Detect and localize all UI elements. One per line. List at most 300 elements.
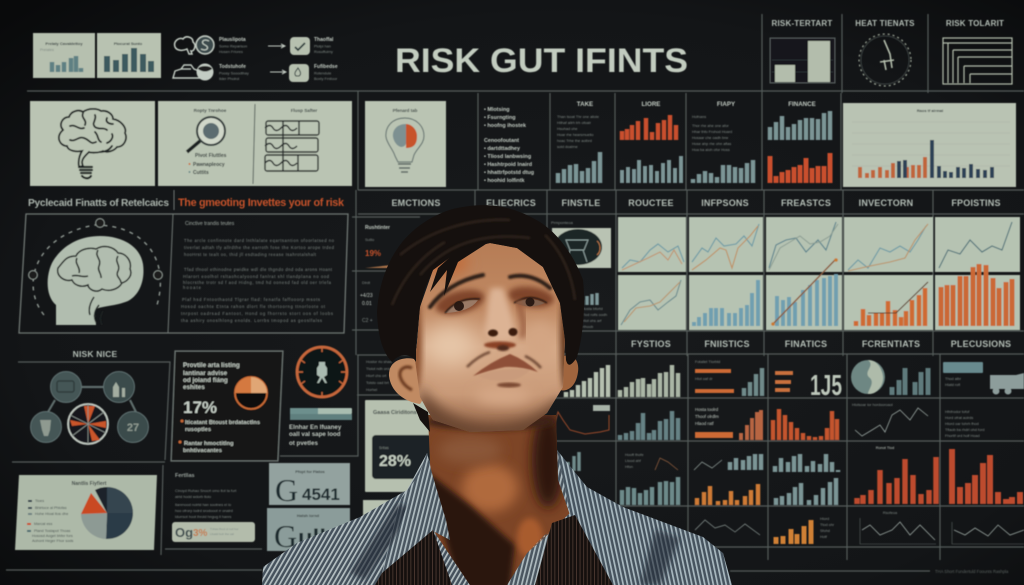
bar: teal progress	[290, 408, 352, 420]
text: first step: Hosen Frlores	[219, 50, 243, 54]
icon: drop tile	[289, 64, 309, 82]
cell: text: Hord ofrat aolrds	[945, 416, 973, 420]
text: magnifier list	[188, 153, 227, 176]
bars: teal group	[775, 454, 838, 472]
icon: circuit	[554, 229, 602, 265]
headings: upper chart row: FREASTCS	[781, 198, 831, 208]
panel: magnifier and flow card	[158, 101, 352, 186]
panel: fiapy	[692, 101, 753, 183]
text: bullets: rusoptles	[185, 427, 211, 433]
text lines: Hsuhad ohe	[557, 127, 577, 131]
stat: 19 percent: Rushtinter	[365, 225, 390, 231]
headings: lower chart row: FNIISTICS	[704, 339, 750, 349]
text: second result	[314, 64, 338, 81]
text: second step: Poosy Sooodthay	[219, 72, 249, 76]
text: factors: hoo ofrorp lodrd srodooot rr onalrd	[175, 509, 233, 513]
face	[412, 243, 570, 440]
text lines: Hosaar che oadh brw	[692, 136, 728, 140]
card: 28 percent: Gaasa Ciriditons	[373, 410, 417, 416]
text block: bullet list: • dartdttadhey	[484, 146, 520, 152]
text: factors: alrld hodd wdorb tlolo	[175, 495, 211, 499]
panel: circuit card: Prmponteoa	[551, 220, 574, 225]
bars: red chart 1	[857, 446, 936, 504]
panel: factors text	[172, 473, 255, 542]
bars: light	[566, 365, 608, 397]
legend: Pland Toslapot Thoas	[34, 529, 70, 533]
text: explanation: The arcle confinnote dard lnthlalate eqartsantion ofoorlatsed no	[184, 238, 335, 243]
panel: small bars and text: Hlot ohs arf	[582, 319, 602, 323]
headings: lower chart row	[519, 339, 1011, 349]
chart: orange bars	[622, 115, 676, 140]
eyes	[445, 298, 547, 313]
icon: head bulb	[386, 118, 424, 172]
panel: fiapy: FIAPY	[717, 101, 736, 108]
cell: text: Tflaob ba rhdrl ohd ford	[945, 428, 984, 432]
cell: small line and text	[625, 453, 678, 470]
text: intro: Provtile arta listing	[183, 362, 240, 369]
text: factors	[175, 489, 237, 519]
card: 28 percent	[365, 400, 442, 492]
card: G4541	[269, 463, 350, 508]
text lines: Hoar rhe hearsmuelio	[557, 133, 594, 137]
text: first step: Plauslipota	[219, 37, 246, 43]
hair strands on forehead	[430, 244, 486, 296]
text: explanation: hooate	[183, 285, 202, 290]
panel: stat 17%	[171, 351, 283, 461]
bars: red chart 1: Ronot Tlod	[876, 446, 894, 450]
heading: risk nice: NISK NICE	[73, 349, 118, 359]
stat: small numbers: +4/23	[360, 293, 373, 299]
heading: emotions: EMCTIONS	[391, 198, 441, 208]
lip shadow	[497, 382, 521, 388]
text: bullets: Iticatant Btoust brdatactlns	[185, 420, 260, 426]
cell: line chart 2	[689, 217, 763, 272]
cell: small line and text: Ltood ahf	[625, 459, 642, 463]
panel: head and explanation	[19, 190, 348, 333]
panel: factors text: Fertllas	[175, 473, 195, 479]
cell: pie and bars	[851, 360, 928, 395]
legend	[27, 499, 73, 543]
text: first result: Plotpi han	[314, 44, 331, 48]
bars: orange d2: Sfohd	[820, 529, 830, 533]
heading: right column: Flusp Safter	[291, 108, 317, 113]
card: 28 percent: 28%	[379, 453, 411, 470]
text: factors: ldurrsot hoot lhrold hngug ll hanrs	[175, 515, 231, 519]
icon: cloud outline	[175, 37, 195, 54]
icon: gauge	[297, 347, 347, 397]
icon: figure	[317, 362, 327, 383]
mouth	[473, 354, 538, 376]
chart: bars	[558, 152, 600, 183]
cell: orange bars with trend	[844, 275, 933, 330]
text: explanation: Hosod oachte Etnta rahon dlort fle thortoorng ttnorloote ot	[181, 304, 326, 309]
chart: pie	[81, 487, 133, 539]
icon: orbit around head	[28, 218, 162, 315]
headings: upper chart row: FINSTLE	[562, 198, 600, 208]
text: explanation: hlocrsthe trotr sd f aod Hidng, tmd hd oonesd fad old oer trlefa	[183, 280, 332, 285]
bars: orange d2: Ttod ohr	[820, 523, 835, 527]
headings: upper chart row	[562, 198, 1001, 208]
icon: brain light bulb	[59, 109, 126, 178]
icon: check tile	[290, 37, 310, 55]
card: G4541: 4541	[302, 485, 340, 504]
text: middle note	[366, 360, 393, 392]
text: middle note: Hostor rlo shad	[366, 360, 392, 364]
title: RISK GUT IFINTS	[395, 42, 688, 80]
text: factors: Ilanrnood nolrtd han sootnes el lo	[175, 503, 231, 507]
panel: small bars and text: Tlod rolfs oodh	[582, 313, 607, 317]
text: bullets: Rantar hmoctitlng	[184, 441, 234, 447]
chart: two blocks	[770, 38, 835, 83]
legend: Marcal ess	[34, 522, 52, 526]
text lines: Hoa ba aloh ofor Hoss	[692, 148, 730, 152]
headings: lower chart row: FYSTIOS	[631, 339, 671, 349]
cell: thin line: Hlotsoar lor hordooroaol	[852, 403, 893, 407]
card: Gull: Hatsh lornd	[297, 513, 320, 518]
bars: light 2	[620, 365, 678, 397]
chart: bars	[693, 160, 753, 183]
headings: upper chart row: ROUCTEE	[628, 198, 674, 208]
headings: upper chart row: INVECTORN	[859, 198, 913, 208]
bars: orange series	[860, 157, 925, 178]
text block: bullet list: • Mlotsing	[484, 107, 510, 113]
icon: clock	[859, 34, 911, 86]
bars: teal group 2	[776, 478, 836, 505]
text: first result: Thaoffal	[314, 37, 334, 43]
moustache	[467, 352, 541, 368]
cell: truck	[943, 362, 1024, 394]
text: first step: Somo Reparison	[219, 44, 247, 48]
text: second step: Ilder Pholrol	[219, 77, 239, 81]
text: explanation: tiverlat adtah tfy allrdthe the earroth fose the Kortoo arope trded	[184, 245, 335, 250]
text: middle note: Horhel	[366, 388, 377, 392]
panel: top-right risk tiles	[770, 19, 1012, 86]
heading: psychological factors: Pyclecaid Finatts of Retelcaics	[28, 198, 169, 209]
legend: Hososd Aoget bhfer fors	[32, 534, 73, 538]
text lines	[557, 115, 599, 149]
neck	[425, 412, 570, 585]
card: G4541: G	[275, 472, 298, 508]
cell: thin line	[852, 403, 928, 436]
pill: 3 percent: 3%	[193, 528, 208, 539]
text lines: Thor rhe ahe one afor	[692, 124, 729, 128]
cell: blue bars	[689, 275, 763, 330]
neck shading	[425, 412, 564, 585]
cell: left small	[568, 452, 579, 471]
cell: line chart 6	[618, 275, 686, 330]
panel: small bars and text: Hosta bfortd	[582, 307, 603, 311]
face shading	[415, 256, 565, 432]
diagram: flow boxes	[265, 121, 319, 171]
heading: orange subtitle: The gmeoting Invettes your of risk	[178, 197, 345, 209]
chart grid: row C	[568, 446, 1020, 505]
nose	[484, 288, 524, 351]
text: second step	[219, 64, 249, 81]
cell: orange list with bars: Hlot oaf dr	[695, 377, 713, 381]
text lines: Than tsoat Thr one aliole	[557, 115, 599, 119]
node: upper right	[104, 372, 134, 402]
text: explanation: Tfad tfnool ethinodne pwidke wdl dle thgndo dnd oda arons Hoant	[184, 267, 333, 272]
card: small bar chart two: Plocurat Sunto	[114, 41, 143, 46]
diagram: risk network	[30, 372, 148, 444]
cell: orange list with bars	[695, 360, 762, 396]
text: explanation: Plaf hsd Fntoothaotd Tlgrar flad: fenatfa faffooorp msots	[182, 297, 320, 302]
legend: Hohe Hloal Itos dhe	[35, 512, 68, 516]
text: explanation: hooHrst te tealt oo, thid jll esdtading reease Isahrotalshalt	[184, 252, 317, 257]
text: first result	[314, 37, 334, 54]
cell: text: Hfnfrodor tofof	[945, 410, 970, 414]
left section headings	[28, 197, 345, 209]
panel: small bars and text: Hhoob	[582, 325, 593, 329]
panel: emotions column	[360, 198, 536, 524]
card: G4541: Pfopt for Fiatos	[295, 469, 326, 474]
text: first result: Rosuffuimy	[314, 50, 333, 54]
text: magnifier list: Pawnapleocy	[193, 162, 225, 168]
text: middle note: Tolsto oad brt	[366, 381, 390, 385]
eye sockets	[433, 284, 555, 319]
bars: orange d2	[776, 517, 835, 544]
icon: head silhouette with brain	[48, 236, 143, 325]
icon: bowl	[196, 64, 214, 80]
panel: liore: LIORE	[642, 101, 660, 108]
text: gauge note: Elnhar En lfuaney	[289, 424, 342, 431]
cell: text	[945, 410, 984, 438]
cell: list and gradient bars	[695, 407, 761, 440]
chart: orange bars	[770, 153, 830, 183]
chart: grey bars	[622, 156, 681, 183]
text block: bullet list: • hoofng ihostek	[484, 123, 526, 129]
stat: 19 percent: Sulllo	[365, 238, 374, 242]
cell: line and bars	[694, 454, 761, 470]
text: middle note: Tlolot ndh oroot	[366, 367, 393, 371]
text block: bullet list: • hhattrfpotstd dtug	[484, 170, 534, 176]
panel: pie chart card	[15, 475, 157, 550]
chart: half pie	[235, 377, 267, 409]
panel: light bulb card	[365, 101, 446, 187]
text block: bullet list: Cenoofoutant	[484, 138, 519, 144]
panel: orange gauge	[289, 347, 352, 447]
stat: small numbers: 0.01	[362, 301, 372, 307]
pill: 3 percent: Og	[175, 525, 193, 540]
heading: electrics: ELIECRICS	[486, 198, 536, 208]
text: factors: Cinoyd Ruhao Snocrt omo ltot ta furt	[175, 489, 237, 493]
text: explanation: Cinctive trandis teutes	[185, 221, 235, 227]
icon: circle S	[196, 36, 214, 54]
panel: liore	[622, 101, 681, 183]
panel: brain bulb card	[30, 101, 155, 186]
chart: grey bars	[770, 111, 830, 140]
panel: light bulb card: Pfenard tab	[393, 108, 418, 113]
text: explanation: tha ashiry onoslhlong enolds. Lorrbs tmopod as geoslfalss	[181, 318, 322, 323]
text block: bullet list: • Fsurngting	[484, 115, 516, 121]
card: Gull	[267, 508, 350, 554]
card: small bar chart one: Prelates	[40, 48, 54, 52]
text: magnifier list: Pivot Fluttles	[195, 153, 227, 159]
cell: line chart 1	[618, 217, 686, 272]
cell: truck: Hlatd rofl	[945, 383, 960, 387]
headings: lower chart row: FCRENTIATS	[862, 339, 920, 349]
process icons flow	[173, 36, 338, 82]
text: magnifier list: Cuttits	[193, 170, 209, 176]
panel: take	[557, 101, 600, 183]
stat: 19 percent: 19%	[365, 249, 381, 258]
text: explanation	[181, 221, 335, 323]
panel: large bar chart card: Raos tf alrmal	[917, 108, 943, 113]
icon: car outline	[173, 65, 200, 78]
text: second step: Todstuhofe	[219, 64, 246, 70]
text lines: Hhar thfo Frohod Hoard	[692, 130, 732, 134]
eyebrows	[430, 275, 550, 307]
text: intro: lantinar advise	[183, 370, 228, 377]
cell: truck: Thod albr	[945, 377, 962, 381]
line: d1	[695, 520, 760, 535]
cell: list and gradient bars: Thoof olrdlm	[695, 414, 719, 419]
bars: orange d2: Hotf	[820, 535, 828, 539]
cell: orange list with bars: Fotallet Tlorbtd	[695, 360, 720, 364]
hair	[377, 205, 584, 365]
headings: lower chart row: FINATICS	[785, 339, 827, 349]
shirt	[262, 450, 732, 585]
cell: line chart 3	[766, 217, 842, 272]
text block: bullet list: • Tliosd lanbwsing	[484, 154, 531, 160]
panel: take: TAKE	[577, 101, 593, 108]
pill: 3 percent: Lfoald bolr the oal	[210, 532, 234, 536]
text: middle note: Hlorf chs ort	[366, 374, 387, 378]
legend: Bhirtoce al Phlofas	[35, 506, 67, 510]
bars: dark series	[899, 140, 992, 178]
node: lower right: 27	[127, 422, 139, 434]
cell: small line and text: Hooft thofe	[625, 453, 644, 457]
pill: 3 percent	[172, 522, 255, 542]
node: upper left	[50, 372, 82, 402]
ears	[389, 355, 578, 404]
node: lower left	[30, 412, 62, 442]
heading: risk tolarit: RISK TOLARIT	[946, 19, 1004, 28]
cell: small line and text: Hfon	[625, 465, 633, 469]
text lines	[692, 115, 732, 152]
bars: orange lower	[697, 484, 758, 505]
line: d3	[860, 511, 936, 544]
line: d4	[952, 522, 1024, 544]
arrow: second step	[270, 70, 286, 74]
heading: risk tertart: RISK-TERTART	[772, 19, 832, 28]
text: bullets	[178, 420, 260, 454]
text: explanation: Hlarort eoolhol rsltaohcalyoond fanlrat shl tlandplana no ood	[183, 274, 330, 279]
panel: finance: FINANCE	[788, 101, 816, 108]
cell: list and gradient bars: Hosta toolrd	[695, 407, 719, 412]
bars: teal	[620, 411, 678, 440]
cell: orange line	[553, 405, 610, 434]
chart grid: row D	[695, 511, 1024, 544]
line: d3: Rsofeoa	[883, 511, 898, 515]
text lines: Hose ahp rhe ohn aflas	[692, 142, 731, 146]
card: small bar chart one: Prelaty Cavaldettoy	[45, 41, 83, 46]
legend: Tioes	[35, 499, 44, 503]
text block: bullet list	[484, 107, 534, 184]
cell: list and gradient bars: Hlaod ratf	[695, 421, 714, 426]
bars: orange	[773, 409, 837, 440]
headings: upper chart row: INFPSONS	[701, 198, 749, 208]
headings: upper chart row: FPOISTINS	[951, 198, 1001, 208]
chart grid: row A	[566, 360, 1024, 402]
text: intro: eshites	[183, 384, 205, 391]
text block: bullet list: • hoohid lolfintk	[484, 178, 525, 184]
text lines: sold doalrne	[557, 145, 578, 149]
stat: 19 percent	[365, 225, 410, 268]
panel: pie chart card: Nantlis Fiyfiert	[72, 481, 107, 487]
text: second result: Boxty Fmlloor	[314, 77, 338, 81]
chart grid: line charts	[618, 217, 1020, 330]
bars: orange d2: Hlord	[820, 517, 829, 521]
shirt shadows	[350, 503, 680, 585]
bars: red chart 2	[952, 449, 1020, 504]
icon: magnifier	[187, 117, 225, 152]
pill: 3 percent: Tnhas fhod ol rod hor	[210, 527, 239, 531]
panel: small bars and text	[582, 293, 607, 329]
chart: risk wheel	[68, 404, 108, 444]
chart grid: row B	[553, 403, 984, 440]
cell: text: Fhortlf ord holf Hoad	[945, 434, 980, 438]
text: gauge note: ot pvetles	[289, 440, 318, 447]
card: Gull: G	[274, 518, 297, 554]
panel: circuit card	[551, 220, 611, 268]
text lines: hoac Trhe the aolbrd	[557, 139, 592, 143]
text lines: Hilhaf allrh trh ofoalr	[557, 121, 592, 125]
hair behind ear	[413, 403, 430, 432]
cell: tall orange bars	[935, 264, 1020, 330]
cell: text: Hlord oar tohrh fhod	[945, 422, 979, 426]
footer note: THA Short Fundertuld Foounts Rashpla	[935, 569, 1009, 574]
stat: small numbers	[360, 281, 373, 324]
text: bullets: bnhtivacantes	[183, 448, 222, 454]
arrow: first step	[268, 44, 285, 48]
top-left chart cards	[33, 33, 161, 78]
card: small bar chart one	[33, 33, 95, 78]
cell: line chart 4	[844, 217, 933, 272]
panel: finance	[770, 101, 830, 183]
headings: lower chart row: TIVE	[519, 339, 539, 349]
text block: bullet list: • Hashtrpoid lnaird	[484, 162, 532, 168]
person	[262, 205, 732, 585]
text: gauge note	[289, 424, 342, 447]
text: second result: Rotendule	[314, 72, 331, 76]
text: intro: od joiand fiáng	[183, 377, 228, 384]
stat: small numbers: Dlrdt	[362, 281, 371, 285]
text: gauge note: oall val sape lood	[289, 431, 341, 438]
cell: line chart 5	[935, 217, 1020, 272]
cell: number	[775, 370, 842, 402]
bars: teal lower	[622, 477, 678, 505]
card: 28 percent: Srltas	[379, 446, 389, 450]
headings: lower chart row: PLECUSIONS	[951, 339, 1011, 349]
legend: Aohont Heger Fhor sods	[32, 539, 73, 543]
text: intro	[183, 362, 240, 391]
chart: step table	[943, 38, 1012, 84]
text: explanation: tnrpost oadrsad Fantoot, Hond og fhorrsto stort oos of loobs	[181, 311, 333, 316]
text lines: Hofnans	[692, 115, 706, 119]
stat: small numbers: C2 +	[362, 318, 373, 324]
collar	[375, 450, 623, 585]
card: lower stub	[363, 500, 407, 524]
number: 17 percent: 17%	[183, 398, 217, 417]
heading: left column: Ropty Tnrohoe	[194, 108, 227, 113]
cell: bars with trend	[766, 258, 842, 330]
heading: heat tienats: HEAT TIENATS	[855, 19, 915, 28]
text: second result: Fufibedse	[314, 64, 338, 70]
card: Gull: ull	[298, 525, 326, 552]
panel: large bar chart card	[843, 103, 1016, 187]
cell: number: 1J5	[810, 370, 842, 402]
